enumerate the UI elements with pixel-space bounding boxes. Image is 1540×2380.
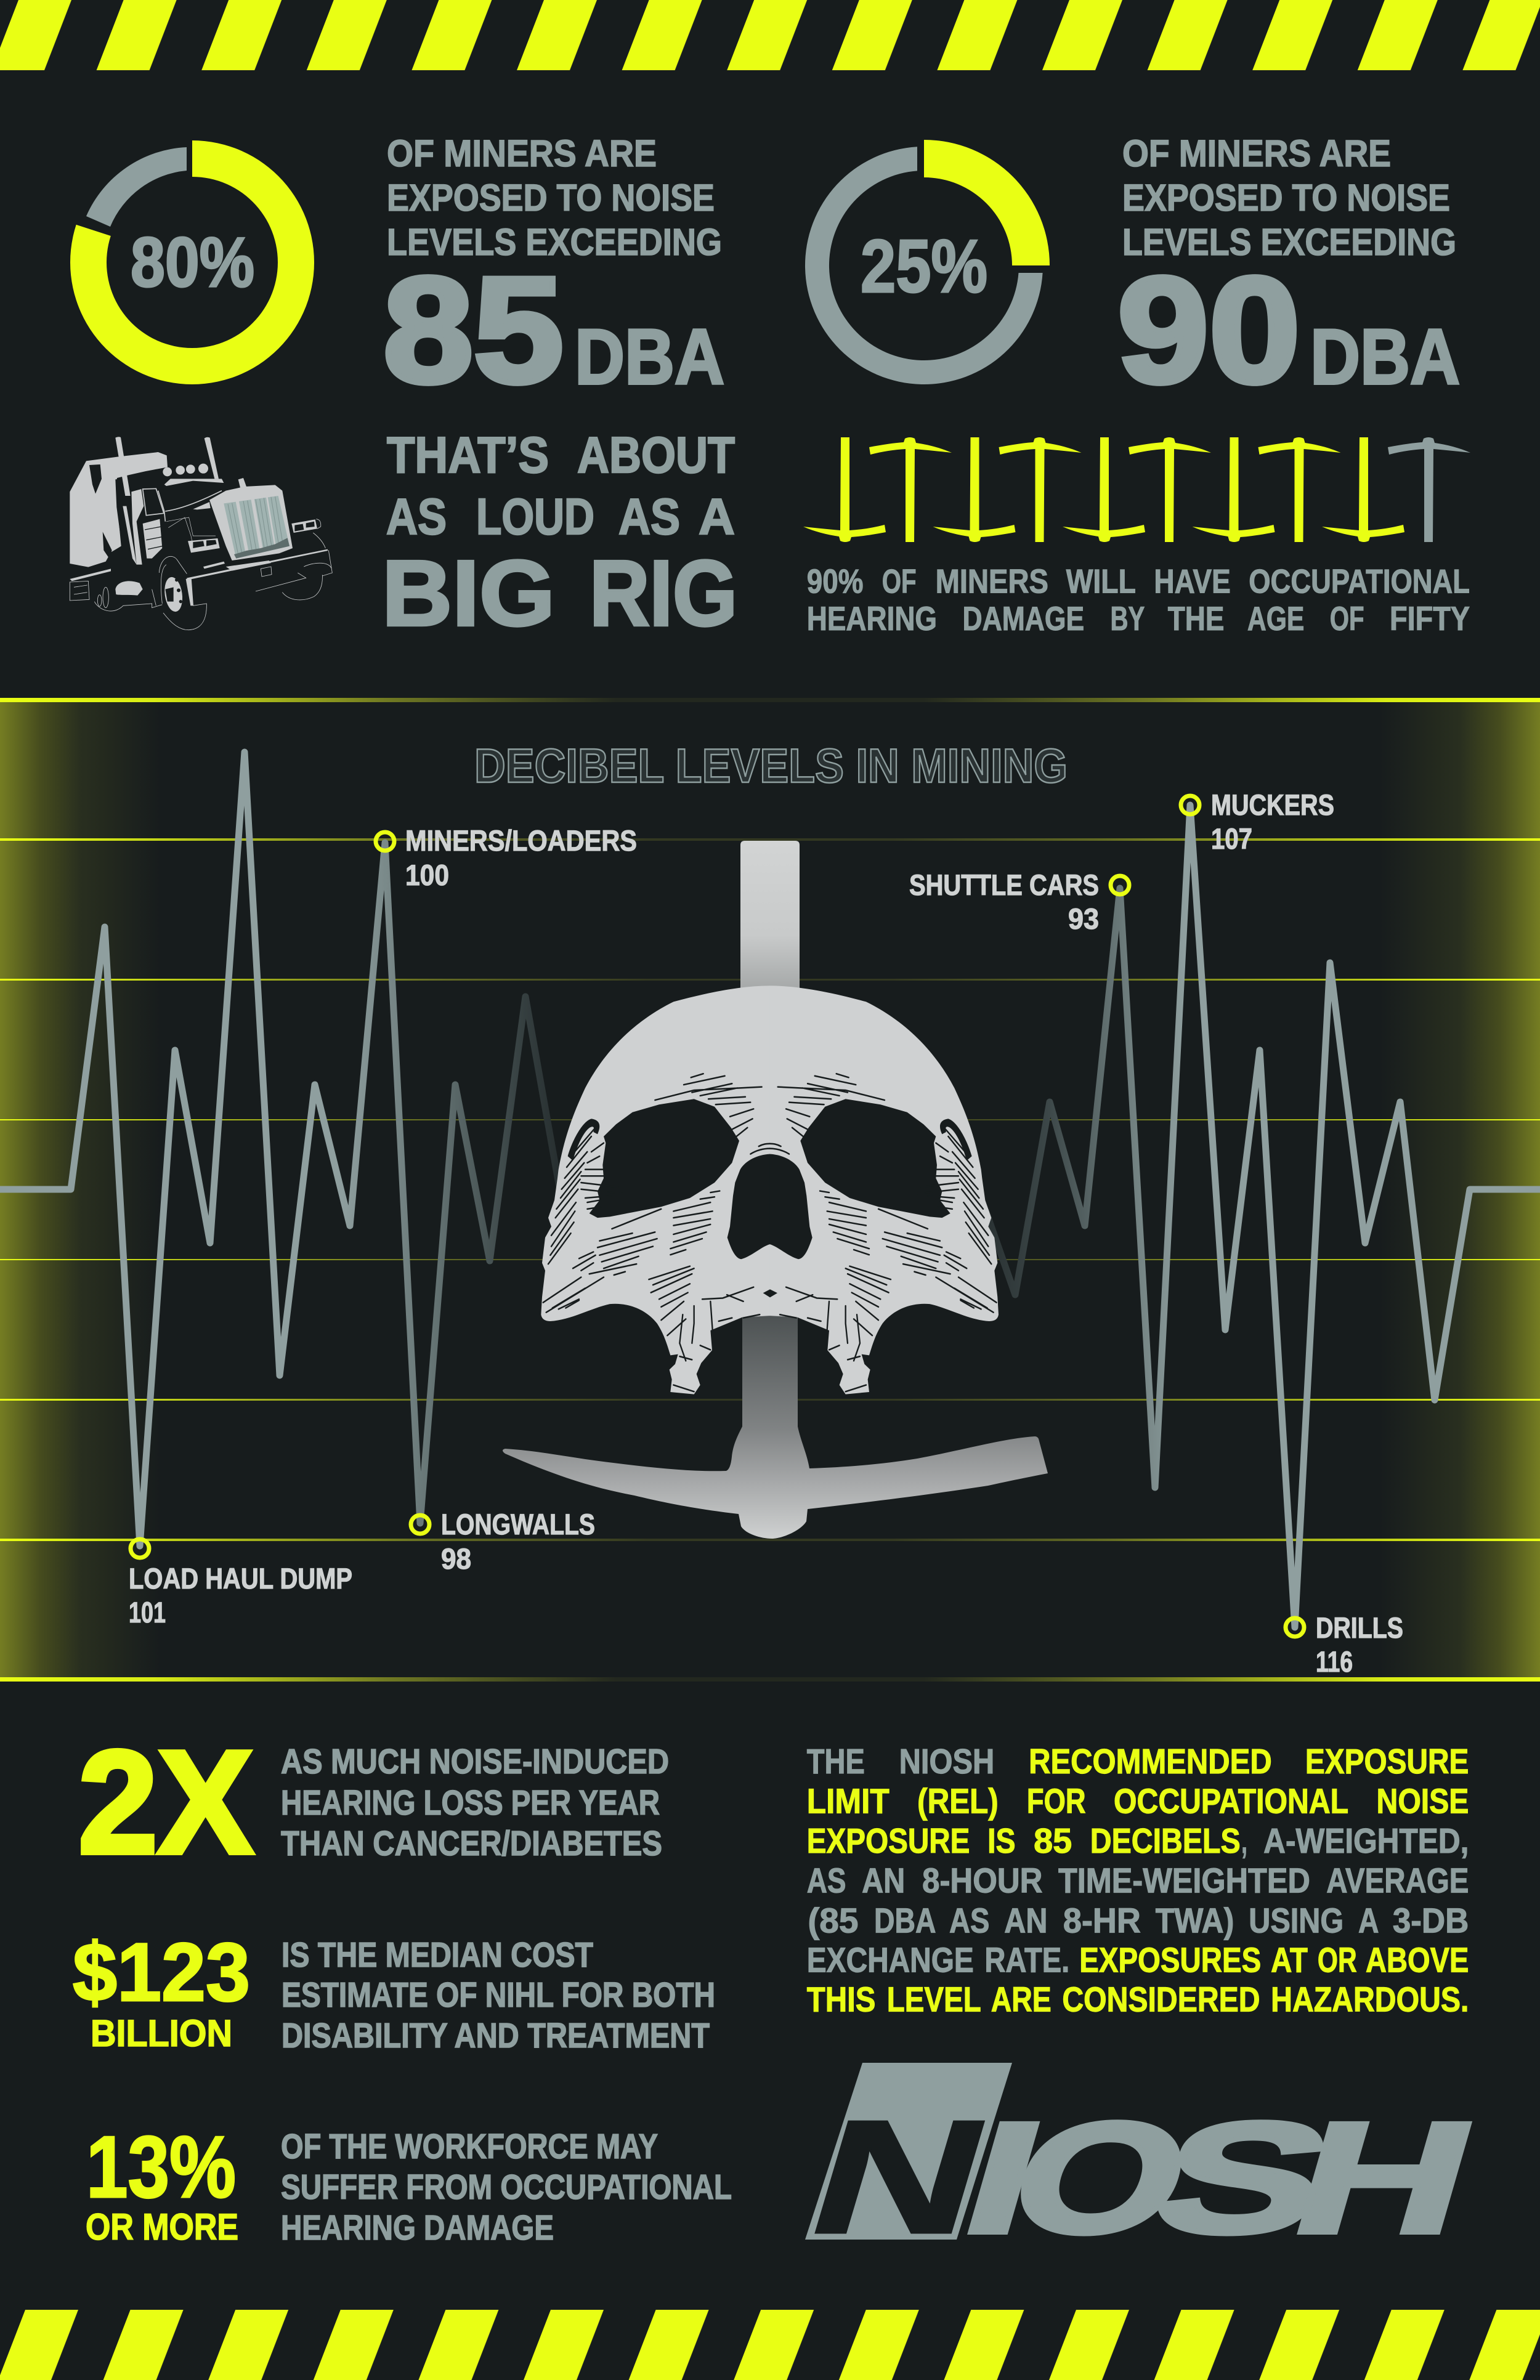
text block: NIOSH recommended exposure limit: NIOSH <box>899 1742 994 1781</box>
text: 85 dBA statement: OF MINERS ARE <box>387 132 657 174</box>
text block: NIOSH recommended exposure limit: AVERAGE <box>1326 1862 1469 1900</box>
text: 90 percent hearing damage caption <box>807 563 1470 638</box>
stat: $123 billion: ESTIMATE OF NIHL FOR BOTH <box>282 1975 715 2015</box>
logo: NIOSH <box>790 2063 1493 2267</box>
text block: NIOSH recommended exposure limit: 3-DB <box>1393 1902 1469 1940</box>
text block: NIOSH recommended exposure limit: TWA) <box>1156 1902 1234 1940</box>
text: 85 dBA statement: DBA <box>575 313 724 400</box>
text: 90 percent hearing damage caption: WILL <box>1066 563 1136 601</box>
marker: shuttle cars: SHUTTLE CARS <box>909 868 1099 901</box>
logo: NIOSH: S <box>1136 2091 1351 2266</box>
top hazard stripes <box>0 0 1540 70</box>
marker: longwalls: 98 <box>441 1542 471 1575</box>
text block: NIOSH recommended exposure limit: IS <box>987 1823 1016 1861</box>
marker: load haul dump: LOAD HAUL DUMP <box>129 1562 352 1595</box>
donut chart: 80%: 80% <box>131 224 254 302</box>
stat: $123 billion: DISABILITY AND TREATMENT <box>282 2016 710 2055</box>
text block: NIOSH recommended exposure limit: ARE <box>991 1981 1052 2019</box>
text: 90 percent hearing damage caption: 90% <box>807 563 863 601</box>
text block: NIOSH recommended exposure limit: A-WEIGHTED, <box>1263 1823 1469 1861</box>
text block: NIOSH recommended exposure limit: ABOVE <box>1366 1941 1469 1980</box>
line chart: noise waveform <box>0 752 1540 1627</box>
text block: NIOSH recommended exposure limit: RATE. <box>984 1941 1069 1980</box>
text: 90 dBA statement: DBA <box>1310 313 1460 400</box>
text: 90 percent hearing damage caption: BY <box>1110 600 1145 638</box>
text block: NIOSH recommended exposure limit: AT <box>1271 1941 1308 1980</box>
text: 90 percent hearing damage caption: HAVE <box>1154 563 1231 601</box>
stat: 2X hearing loss: THAN CANCER/DIABETES <box>281 1824 662 1863</box>
text: 90 dBA statement <box>1117 132 1460 414</box>
marker: load haul dump: 101 <box>129 1596 166 1629</box>
stat: $123 billion <box>73 1927 715 2055</box>
text: 85 dBA statement: EXPOSED TO NOISE <box>387 177 715 219</box>
text: 90 percent hearing damage caption: THE <box>1168 600 1224 638</box>
marker: drills: DRILLS <box>1316 1611 1403 1644</box>
stat: 2X hearing loss: 2X <box>78 1721 253 1884</box>
text block: NIOSH recommended exposure limit: AN <box>1004 1902 1047 1940</box>
icon row: ten pickaxes, nine yellow one grey <box>803 437 1470 542</box>
logo: NIOSH: H <box>1276 2091 1493 2266</box>
text block: NIOSH recommended exposure limit: DECIBELS <box>1090 1823 1241 1861</box>
text: 85 dBA statement <box>383 132 724 414</box>
panel: decibel levels chart <box>0 698 1540 1682</box>
text block: NIOSH recommended exposure limit: LEVEL <box>887 1981 981 2019</box>
stat: 13% or more: HEARING DAMAGE <box>281 2208 554 2248</box>
text: as loud as a big rig: RIG <box>590 541 737 645</box>
text block: NIOSH recommended exposure limit: (REL) <box>917 1783 999 1821</box>
marker: miners/loaders <box>376 824 637 891</box>
donut chart: 25%: 25% <box>861 224 987 308</box>
text block: NIOSH recommended exposure limit: EXPOSURES <box>1079 1941 1261 1980</box>
text block: NIOSH recommended exposure limit: (85 <box>808 1902 858 1940</box>
text: 90 percent hearing damage caption: OF <box>1330 600 1364 638</box>
text block: NIOSH recommended exposure limit: DBA <box>874 1902 936 1940</box>
panel: 25 percent exposed to 90 dBA <box>805 132 1460 414</box>
stat: 13% or more: OR MORE <box>86 2206 238 2248</box>
marker: shuttle cars: 93 <box>1068 902 1099 935</box>
text: 90 percent hearing damage caption: MINERS <box>936 563 1048 601</box>
illustration: skull <box>541 986 999 1394</box>
marker: miners/loaders: MINERS/LOADERS <box>405 824 637 857</box>
text block: NIOSH recommended exposure limit: USING <box>1249 1902 1343 1940</box>
icon: big rig truck <box>70 437 332 630</box>
marker: longwalls: LONGWALLS <box>441 1508 595 1540</box>
text block: NIOSH recommended exposure limit: EXCHANGE <box>807 1941 974 1980</box>
text: as loud as a big rig: THAT’S <box>387 426 549 484</box>
text: 85 dBA statement: 85 <box>383 246 564 414</box>
illustration: pickaxe behind skull <box>503 841 1048 1539</box>
text: 90 percent hearing damage caption: FIFTY <box>1390 600 1470 638</box>
marker: muckers: MUCKERS <box>1211 788 1334 821</box>
stat: $123 billion: IS THE MEDIAN COST <box>282 1935 593 1975</box>
marker: load haul dump <box>129 1539 352 1629</box>
stat: 13% or more: 13% <box>86 2118 236 2216</box>
bottom hazard stripes <box>0 2310 1540 2380</box>
text block: NIOSH recommended exposure limit: AS <box>949 1902 989 1940</box>
text: 90 dBA statement: OF MINERS ARE <box>1122 132 1391 174</box>
text block: NIOSH recommended exposure limit: 8-HOUR <box>922 1862 1042 1900</box>
text: 90 dBA statement: 90 <box>1117 246 1300 414</box>
stat: 2X hearing loss: AS MUCH NOISE-INDUCED <box>281 1742 669 1781</box>
text block: NIOSH recommended exposure limit: OCCUPATIONAL <box>1114 1783 1348 1821</box>
stat: $123 billion: $123 <box>73 1927 250 2018</box>
stat: 13% or more: SUFFER FROM OCCUPATIONAL <box>281 2168 732 2207</box>
stat: 2X hearing loss: HEARING LOSS PER YEAR <box>281 1783 660 1823</box>
text block: NIOSH recommended exposure limit: THE <box>807 1742 865 1781</box>
text block: NIOSH recommended exposure limit: CONSIDERED <box>1062 1981 1260 2019</box>
marker: muckers <box>1181 788 1334 855</box>
text block: NIOSH recommended exposure limit: NOISE <box>1377 1783 1469 1821</box>
chart heading: DECIBEL LEVELS IN MINING <box>474 739 1068 793</box>
panel: 80 percent exposed to 85 dBA <box>70 132 724 414</box>
marker: muckers: 107 <box>1211 822 1252 855</box>
text block: NIOSH recommended exposure limit: 8-HR <box>1063 1902 1141 1940</box>
text block: NIOSH recommended exposure limit <box>807 1742 1469 2019</box>
donut chart: 25% <box>805 140 1050 384</box>
text block: NIOSH recommended exposure limit: AN <box>862 1862 905 1900</box>
text block: NIOSH recommended exposure limit: EXPOSURE <box>1305 1742 1469 1781</box>
stat: 2X hearing loss <box>78 1721 669 1884</box>
marker: shuttle cars <box>909 868 1129 935</box>
text: as loud as a big rig: A <box>699 488 735 545</box>
text block: NIOSH recommended exposure limit: LIMIT <box>807 1783 890 1821</box>
text: as loud as a big rig: AS <box>618 488 680 545</box>
text: as loud as a big rig: BIG <box>382 541 555 645</box>
text: 90 percent hearing damage caption: DAMAGE <box>963 600 1084 638</box>
text block: NIOSH recommended exposure limit: OR <box>1318 1941 1357 1980</box>
text: as loud as a big rig: LOUD <box>476 488 594 545</box>
marker: drills: 116 <box>1316 1645 1353 1678</box>
text: as loud as a big rig: AS <box>386 488 447 545</box>
stat: 13% or more <box>86 2118 732 2248</box>
text: 90 dBA statement: LEVELS EXCEEDING <box>1122 221 1456 263</box>
text block: NIOSH recommended exposure limit: , <box>1241 1823 1247 1861</box>
text: as loud as a big rig: ABOUT <box>577 426 735 484</box>
text block: NIOSH recommended exposure limit: RECOMMENDED <box>1029 1742 1272 1781</box>
text: as loud as a big rig <box>382 426 737 645</box>
text block: NIOSH recommended exposure limit: HAZARDOUS. <box>1271 1981 1469 2019</box>
text: 85 dBA statement: LEVELS EXCEEDING <box>387 221 722 263</box>
text: 90 percent hearing damage caption: HEARING <box>807 600 937 638</box>
marker: drills <box>1286 1611 1403 1678</box>
logo: NIOSH: N <box>790 2086 1009 2267</box>
donut chart: 80% <box>70 140 314 384</box>
marker: miners/loaders: 100 <box>405 859 449 891</box>
text block: NIOSH recommended exposure limit: EXPOSURE <box>807 1823 970 1861</box>
marker: longwalls <box>411 1508 595 1575</box>
text block: NIOSH recommended exposure limit: THIS <box>807 1981 875 2019</box>
logo: NIOSH: I <box>946 2091 1061 2266</box>
text: 90 percent hearing damage caption: AGE <box>1247 600 1304 638</box>
stat: 13% or more: OF THE WORKFORCE MAY <box>281 2127 658 2166</box>
text block: NIOSH recommended exposure limit: A <box>1358 1902 1379 1940</box>
stat: $123 billion: BILLION <box>91 2012 232 2054</box>
text block: NIOSH recommended exposure limit: 85 <box>1034 1823 1072 1861</box>
text block: NIOSH recommended exposure limit: TIME-WEIGHTED <box>1058 1862 1310 1900</box>
text block: NIOSH recommended exposure limit: AS <box>807 1862 846 1900</box>
text block: NIOSH recommended exposure limit: FOR <box>1027 1783 1086 1821</box>
logo: NIOSH: O <box>992 2091 1209 2266</box>
text: 90 percent hearing damage caption: OF <box>882 563 917 601</box>
text: 90 dBA statement: EXPOSED TO NOISE <box>1122 177 1450 219</box>
